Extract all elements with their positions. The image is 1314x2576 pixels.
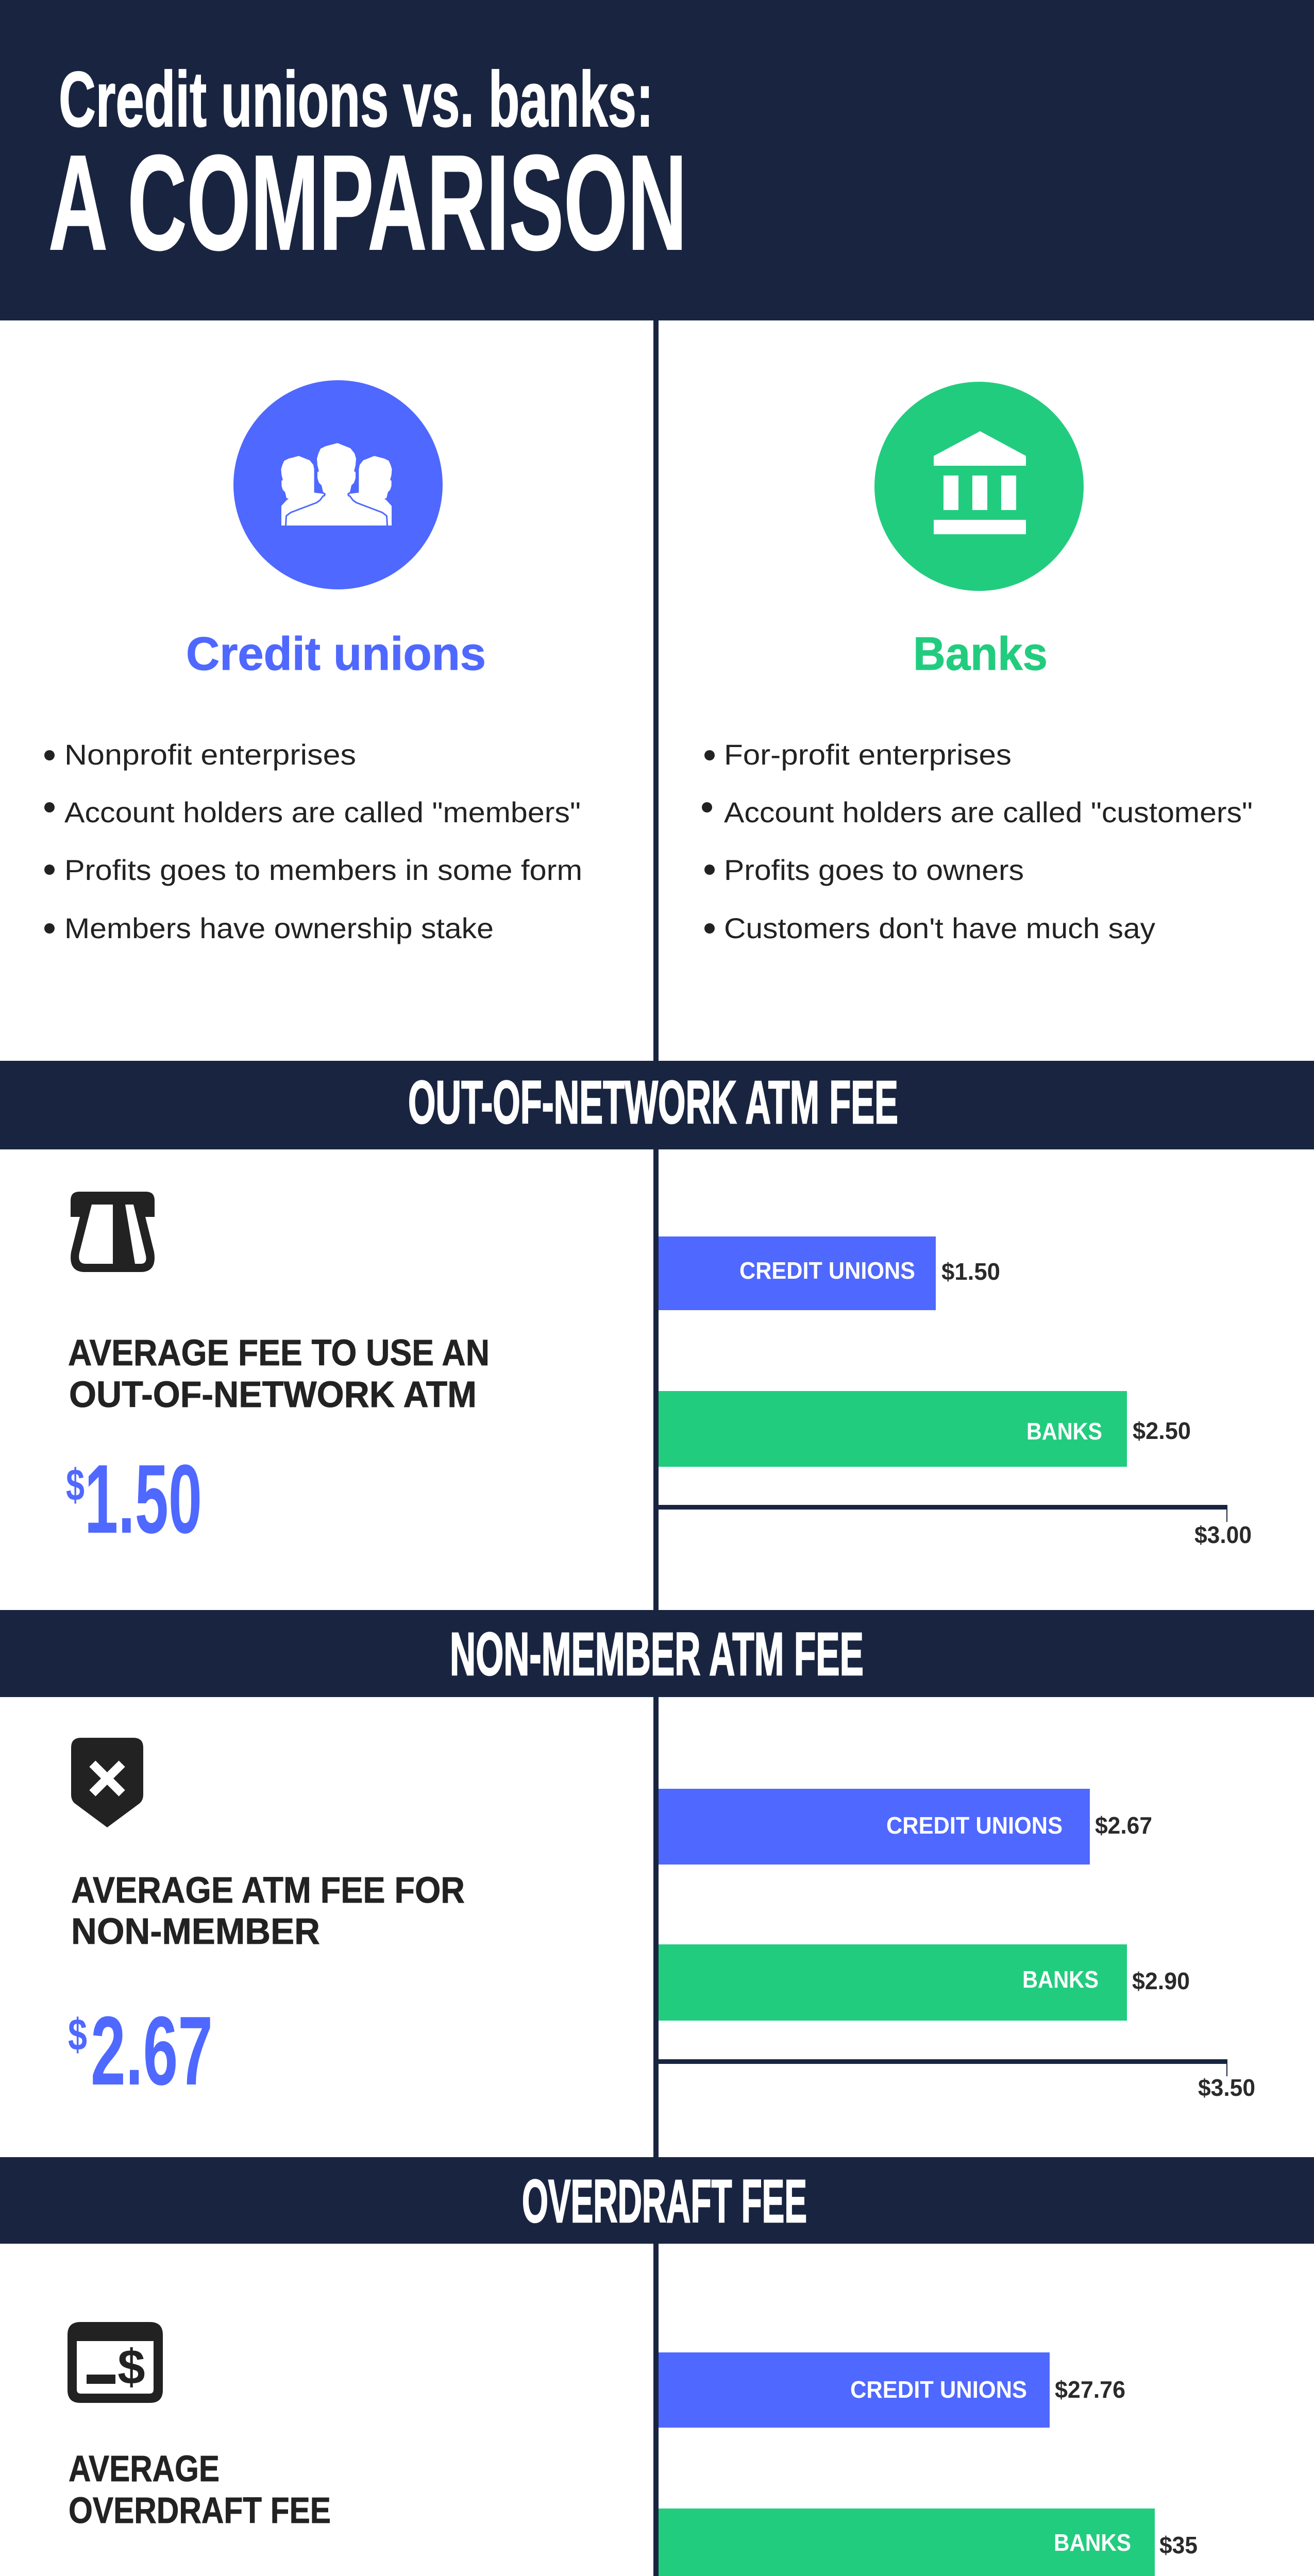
panel: banks overview bbox=[702, 382, 1253, 944]
bar: banks $35: $35 bbox=[1159, 2532, 1198, 2558]
section banner: out-of-network ATM fee: OUT-OF-NETWORK ATM FEE bbox=[408, 1069, 898, 1137]
section banner: non-member ATM fee bbox=[0, 1610, 1314, 1697]
big number: $1.50: 1.50 bbox=[85, 1445, 202, 1554]
axis: $3.00 bbox=[659, 1505, 1252, 1548]
bullet list: credit unions bbox=[44, 738, 582, 944]
big number: $1.50 bbox=[66, 1445, 202, 1554]
heading: Banks: Banks bbox=[913, 628, 1048, 680]
bar: credit unions $2.67 bbox=[659, 1789, 1152, 1865]
section banner: non-member ATM fee: NON-MEMBER ATM FEE bbox=[450, 1620, 864, 1688]
big number: $2.67: $ bbox=[68, 2010, 87, 2060]
bar: banks $2.50: $2.50 bbox=[1133, 1417, 1191, 1444]
panel: overdraft stat bbox=[67, 2322, 331, 2576]
bar chart: out-of-network ATM fee bbox=[659, 1236, 1252, 1548]
stat heading bbox=[69, 2449, 331, 2531]
stat heading: OVERDRAFT FEE bbox=[69, 2490, 331, 2531]
bar: banks $2.50 bbox=[659, 1391, 1191, 1467]
bar: banks $35 bbox=[659, 2509, 1198, 2576]
bullet list: credit unions: Nonprofit enterprises bbox=[64, 738, 356, 771]
icon: overdraft window with dollar: $ bbox=[117, 2340, 145, 2395]
stat heading bbox=[71, 1870, 465, 1952]
bar: credit unions $27.76 bbox=[659, 2352, 1125, 2428]
bullet list: banks bbox=[702, 738, 1253, 944]
bar: credit unions $2.67: $2.67 bbox=[1095, 1812, 1152, 1839]
title banner bbox=[0, 0, 1314, 320]
bar: credit unions $2.67: CREDIT UNIONS bbox=[886, 1812, 1063, 1839]
section banner: overdraft fee bbox=[0, 2157, 1314, 2244]
panel: out-of-network ATM stat bbox=[66, 1192, 490, 1554]
section banner: overdraft fee: OVERDRAFT FEE bbox=[522, 2167, 807, 2235]
icon: ATM card slot bbox=[71, 1192, 155, 1272]
stat heading: AVERAGE ATM FEE FOR bbox=[71, 1870, 465, 1911]
big number: $1.50: $ bbox=[66, 1460, 85, 1510]
bullet list: banks: Profits goes to owners bbox=[724, 854, 1024, 886]
big number: $2.67 bbox=[68, 1996, 213, 2106]
icon: shield with X bbox=[71, 1738, 143, 1827]
title line: A COMPARISON: A COMPARISON bbox=[48, 127, 687, 278]
bullet list: banks: Customers don't have much say bbox=[724, 912, 1155, 944]
bar: banks $35: BANKS bbox=[1054, 2529, 1131, 2556]
stat heading: OUT-OF-NETWORK ATM bbox=[69, 1375, 477, 1415]
big number: $2.67: 2.67 bbox=[91, 1996, 213, 2106]
section banner: out-of-network ATM fee bbox=[0, 1061, 1314, 1149]
bar: banks $2.90 bbox=[659, 1944, 1190, 2021]
axis: $3.50: $3.50 bbox=[1198, 2074, 1255, 2101]
heading: Credit unions: Credit unions bbox=[186, 628, 486, 680]
bar: credit unions $27.76: CREDIT UNIONS bbox=[850, 2376, 1027, 2403]
stat heading: AVERAGE FEE TO USE AN bbox=[68, 1333, 490, 1374]
panel: credit unions overview bbox=[44, 380, 582, 944]
stat heading: AVERAGE bbox=[69, 2449, 220, 2489]
bar: credit unions $1.50: CREDIT UNIONS bbox=[739, 1257, 915, 1284]
icon: overdraft window with dollar bbox=[68, 2322, 163, 2403]
bar chart: overdraft fee bbox=[659, 2352, 1247, 2576]
stat heading bbox=[68, 1333, 490, 1415]
bullet list: credit unions: Account holders are called "members" bbox=[64, 796, 581, 828]
panel: non-member ATM stat bbox=[68, 1738, 465, 2106]
bar: credit unions $1.50: $1.50 bbox=[941, 1258, 1000, 1285]
bar chart: non-member ATM fee bbox=[659, 1789, 1255, 2101]
bar: banks $2.90: $2.90 bbox=[1132, 1968, 1190, 1994]
bar: banks $2.50: BANKS bbox=[1026, 1418, 1102, 1445]
stat heading: NON-MEMBER bbox=[71, 1911, 320, 1952]
bullet list: banks: Account holders are called "customers" bbox=[724, 796, 1253, 828]
bar: credit unions $27.76: $27.76 bbox=[1055, 2376, 1125, 2403]
axis: $3.50 bbox=[659, 2059, 1255, 2101]
bullet list: banks: For-profit enterprises bbox=[724, 738, 1012, 771]
bullet list: credit unions: Members have ownership stake bbox=[64, 912, 494, 944]
bar: credit unions $1.50 bbox=[659, 1236, 1000, 1310]
icon: bank building bbox=[874, 382, 1084, 591]
axis: $3.00: $3.00 bbox=[1194, 1521, 1252, 1548]
bar: banks $2.90: BANKS bbox=[1022, 1966, 1099, 1993]
title line: Credit unions vs. banks: Credit unions vs. banks: bbox=[59, 56, 653, 143]
icon: three people bbox=[233, 380, 443, 589]
bullet list: credit unions: Profits goes to members in some form bbox=[64, 854, 582, 886]
